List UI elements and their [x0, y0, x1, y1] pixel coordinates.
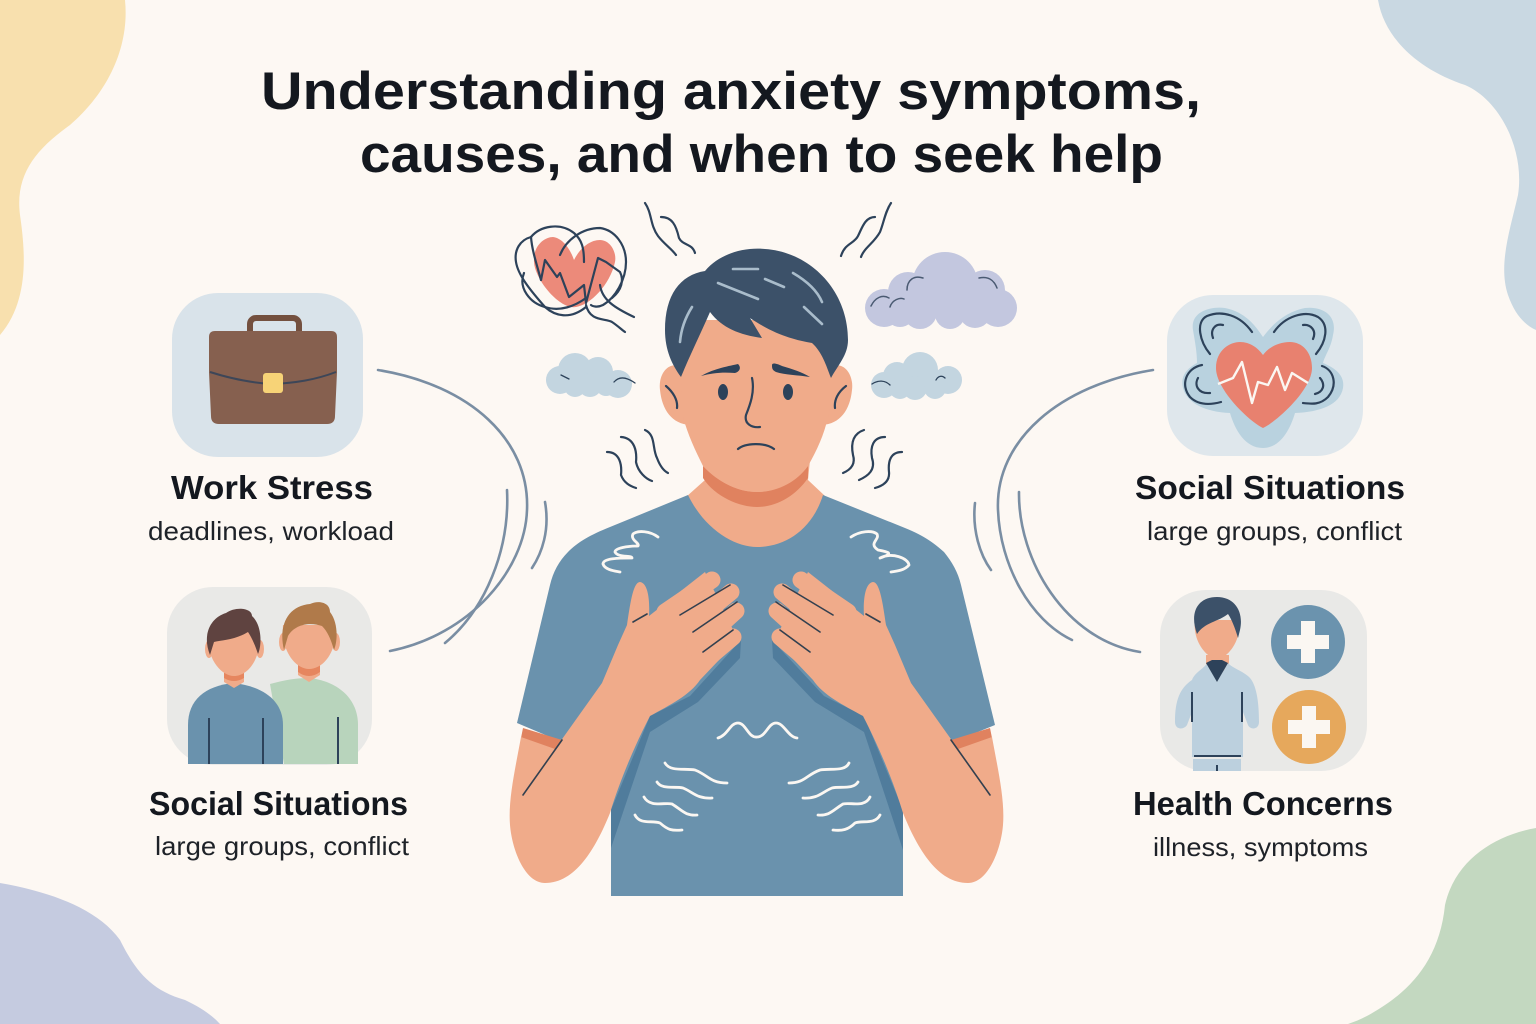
sublabel: large groups: large groups, conflict — [155, 831, 410, 861]
cloud: light blue left — [546, 353, 635, 398]
label: social situations: Social Situations — [149, 785, 408, 822]
left arm and hand — [510, 572, 738, 883]
white tension squiggles on shirt — [603, 532, 909, 830]
connector arcs: left — [378, 370, 547, 651]
nose and mouth — [738, 378, 774, 449]
hair — [665, 249, 848, 378]
background blob: bottom left — [0, 883, 220, 1024]
background blob: top right — [1378, 0, 1536, 330]
sublabel: work stress: deadlines, workload — [148, 516, 394, 546]
eyes and brows — [701, 363, 810, 400]
right arm and hand — [775, 572, 1003, 883]
icon: anxious heart — [1167, 295, 1363, 456]
background blob: bottom right — [1348, 828, 1536, 1024]
icon: scribbled heart — [516, 226, 634, 332]
icon: doctor and medical crosses — [1160, 590, 1367, 771]
panel: social situations left — [149, 587, 410, 861]
sublabel: illness: illness, symptoms — [1153, 832, 1368, 862]
panel: work stress — [148, 293, 394, 546]
panel: social situations right — [1135, 295, 1405, 546]
first person — [188, 609, 283, 764]
worry squiggles around head — [607, 203, 902, 488]
cloud: lavender — [865, 252, 1017, 329]
title — [261, 62, 1201, 184]
label: work stress: Work Stress — [171, 469, 373, 506]
face — [680, 320, 832, 492]
ears — [660, 365, 852, 425]
panel: health concerns — [1133, 590, 1393, 862]
connector arcs: right — [974, 370, 1153, 652]
label: social situations: Social Situations — [1135, 469, 1405, 506]
background blob: top left — [0, 0, 126, 335]
hair highlights — [680, 269, 822, 342]
shirt — [517, 495, 995, 896]
icon: briefcase — [172, 293, 363, 457]
label: health concerns: Health Concerns — [1133, 785, 1393, 822]
icon: two people — [167, 587, 372, 765]
title: Understanding anxiety symptoms, — [261, 62, 1201, 121]
second person — [270, 602, 358, 764]
shirt shadow under arms — [611, 640, 903, 850]
sublabel: large groups: large groups, conflict — [1147, 516, 1403, 546]
neck shade — [703, 466, 808, 507]
neck — [686, 460, 825, 548]
cloud: light blue right — [871, 352, 962, 400]
title: causes, and when to seek help — [360, 125, 1163, 184]
central figure: anxious person — [510, 249, 1003, 896]
